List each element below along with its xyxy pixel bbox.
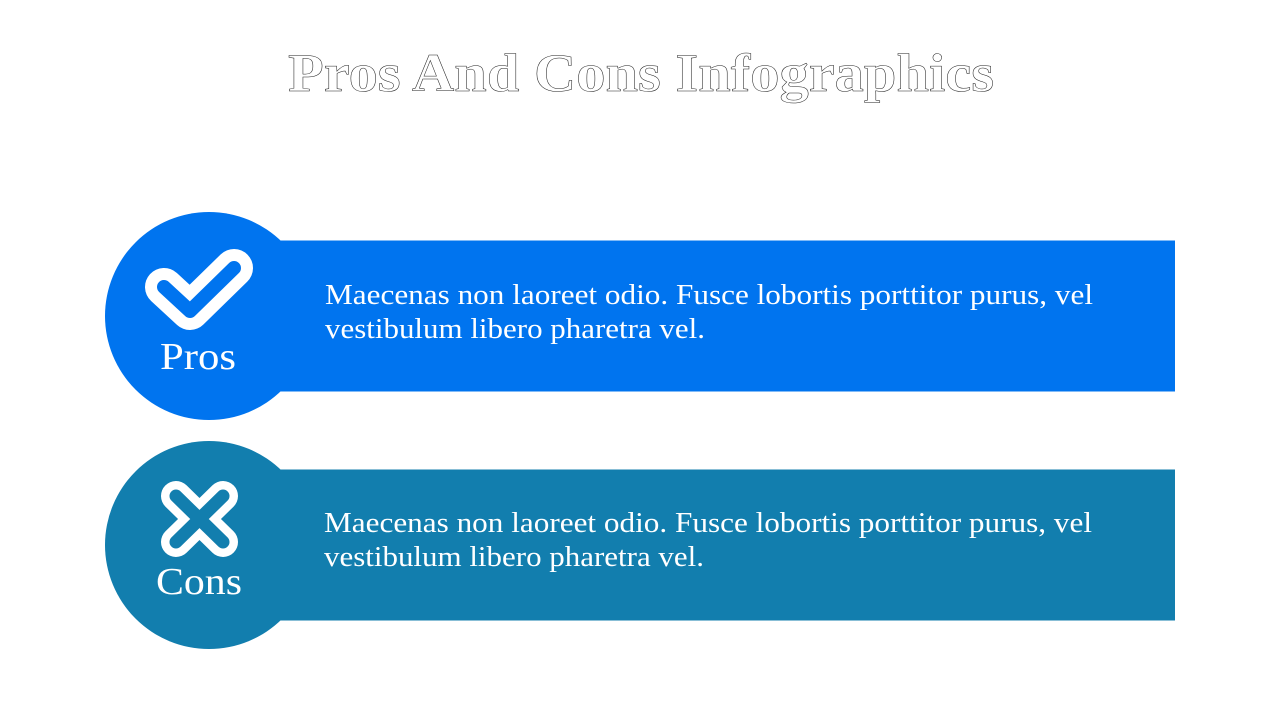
title: Pros And Cons Infographics: [288, 43, 994, 103]
icon: cross mark: [176, 496, 223, 542]
pros description: vestibulum libero pharetra vel.: [325, 314, 705, 345]
cons description: Maecenas non laoreet odio. Fusce lobortis porttitor purus, vel: [324, 508, 1092, 539]
cons description: [324, 508, 1092, 573]
panel: cons: [105, 441, 1175, 649]
icon: check mark: [164, 268, 234, 311]
pros description: Maecenas non laoreet odio. Fusce lobortis porttitor purus, vel: [325, 280, 1093, 311]
pros label: Pros: [160, 336, 236, 378]
pros description: [325, 280, 1093, 345]
cons circle and bar: [105, 441, 1175, 649]
panel: pros: [105, 212, 1175, 420]
cons label: Cons: [156, 561, 242, 603]
cons description: vestibulum libero pharetra vel.: [324, 542, 704, 573]
pros circle and bar: [105, 212, 1175, 420]
